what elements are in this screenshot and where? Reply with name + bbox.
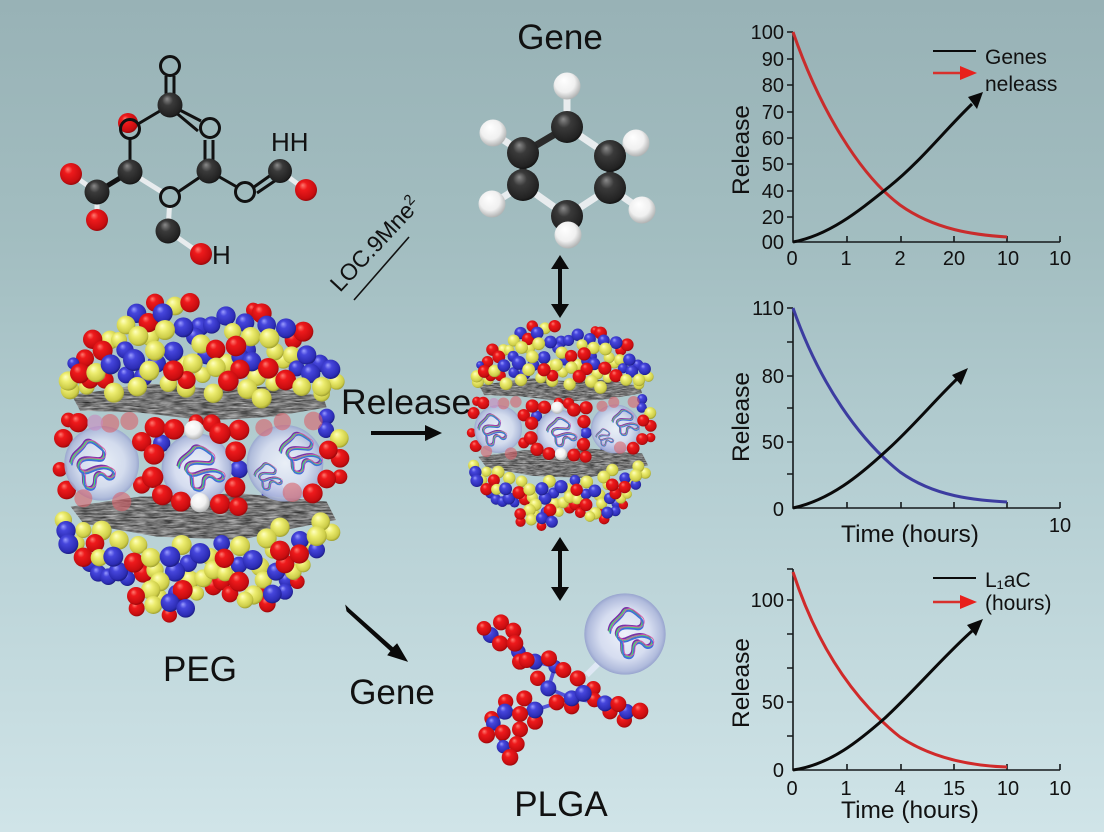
x tick labels: 10 [997,248,1019,270]
arrow: nanoparticle to PLGA [551,537,569,601]
y tick labels: 100 [751,590,784,612]
x tick labels: 15 [943,778,965,800]
top sphere cluster [59,293,345,408]
label: PLGA: PLGA [514,785,608,824]
y tick labels: 40 [762,181,784,203]
bottom sphere cluster [55,511,340,623]
x tick labels: 2 [894,248,906,270]
top silica band [72,383,327,421]
chart: bottom release curves: Release [728,638,755,728]
x tick labels: 0 [786,248,798,270]
x tick labels: 10 [1049,778,1071,800]
x tick labels: 4 [894,778,906,800]
x tick labels: 1 [840,778,852,800]
x tick labels: 1 [840,248,852,270]
y tick labels: 80 [762,366,784,388]
x tick labels: 10 [997,778,1019,800]
y tick labels: 0 [773,760,784,782]
middle band back spheres [53,409,349,505]
molecule: top-left structure [60,56,317,270]
arrow: to gene [346,606,407,661]
legend: Genes [985,46,1047,69]
label: Gene lower: Gene [349,673,435,712]
rotated formula label: 2 [400,191,419,209]
y tick labels: 0 [773,499,784,521]
y tick labels [752,298,784,521]
molecule: benzene ring [478,72,656,248]
molecule: top-left structure: H [212,240,231,270]
y tick labels: 50 [762,432,784,454]
y tick labels: 60 [762,128,784,150]
legend: L₁aC [985,569,1031,592]
chart: bottom release curves [728,569,1071,824]
chart: middle release curves [728,298,1071,548]
nanoparticle: small copy [467,320,657,531]
y tick labels: 20 [762,207,784,229]
y tick labels: 110 [752,298,784,320]
legend [933,569,1052,615]
gene capsule [584,593,666,675]
chart: middle release curves: 10 [1049,515,1071,537]
legend [933,46,1057,96]
legend: (hours) [985,592,1052,615]
y tick labels: 100 [751,22,784,44]
label: Release: Release [341,382,471,422]
arrow: release [371,425,442,441]
x tick labels: 20 [943,248,965,270]
y tick labels: 70 [762,102,784,124]
molecule: PLGA chain with gene capsule [477,593,666,766]
x tick labels [786,248,1071,270]
y tick labels [751,590,784,782]
chart: top release curves [728,22,1071,270]
y tick labels: 90 [762,49,784,71]
x tick labels: 0 [786,778,798,800]
chart: bottom release curves: Time (hours) [841,797,979,824]
y tick labels [751,22,784,254]
y tick labels: 50 [762,154,784,176]
molecule: top-left structure: HH [271,127,309,157]
y tick labels: 80 [762,75,784,97]
heading: Gene: Gene [517,18,603,57]
chart: top release curves: Release [728,105,755,195]
y tick labels: 50 [762,692,784,714]
left capsule with gene [64,426,139,501]
x tick labels: 10 [1049,248,1071,270]
legend: neleass [985,73,1057,96]
nanoparticle: large PEG-PLGA particle [53,293,349,623]
x tick labels [786,778,1071,800]
y tick labels: 00 [762,232,784,254]
bottom silica band [71,493,336,540]
middle band front spheres [69,412,338,516]
chart: middle release curves: Release [728,372,755,462]
label: PEG: PEG [163,650,237,689]
right capsule with gene [247,425,323,502]
center capsule with gene [162,433,232,503]
rotated formula label: LOC.9Mne [325,197,420,296]
chart: middle release curves: Time (hours) [841,521,979,548]
arrow: gene to nanoparticle [551,255,569,318]
